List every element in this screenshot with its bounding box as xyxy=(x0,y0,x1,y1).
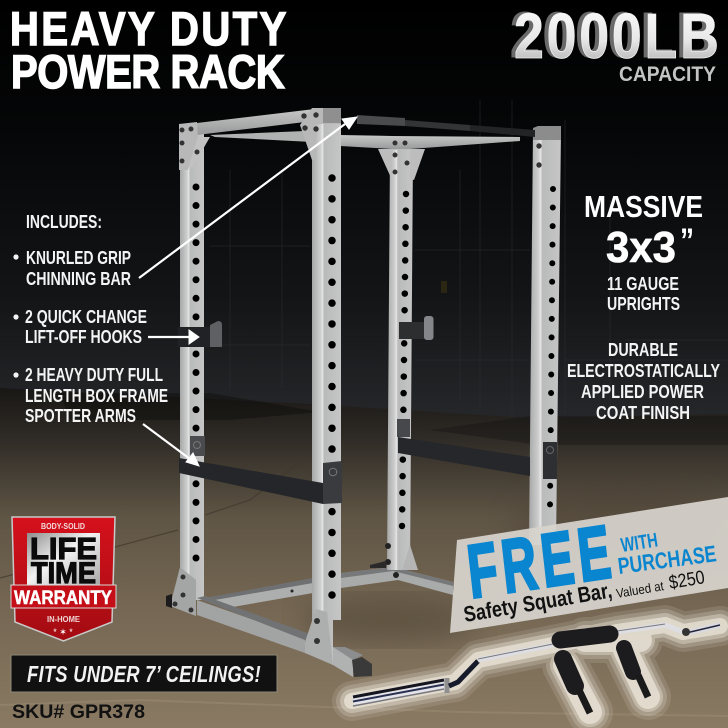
background: dark garage wall xyxy=(0,0,728,420)
specs text: COAT FINISH xyxy=(596,403,690,423)
includes list: INCLUDES: xyxy=(26,212,102,232)
specs text xyxy=(567,189,720,423)
background: concrete floor xyxy=(0,388,728,728)
badge ribbon xyxy=(11,585,116,608)
bonus description: Safety Squat Bar, xyxy=(462,578,614,627)
rear centre upright xyxy=(370,150,418,578)
rear spotter arm xyxy=(397,419,557,479)
left floor base xyxy=(166,567,310,653)
includes list: LENGTH BOX FRAME xyxy=(25,386,168,406)
front centre upright xyxy=(300,108,341,665)
bar glow xyxy=(352,625,720,712)
left spotter arm xyxy=(179,436,342,504)
safety squat bar xyxy=(352,624,720,713)
chrome bar xyxy=(478,625,683,660)
badge brand: BODY-SOLID xyxy=(41,522,85,531)
specs text: APPLIED POWER xyxy=(581,382,704,402)
bonus description: $250 xyxy=(667,567,706,594)
arrow: lift-off hooks xyxy=(148,330,199,344)
capacity heading: 2000LB xyxy=(510,0,715,71)
specs text: UPRIGHTS xyxy=(607,294,680,314)
capacity heading: CAPACITY xyxy=(619,62,716,86)
chin-up bar xyxy=(357,115,535,137)
arrow: spotter arms xyxy=(143,424,199,466)
title: HEAVY DUTY xyxy=(10,4,286,56)
ceiling callout xyxy=(11,655,277,692)
left sleeve xyxy=(353,684,444,701)
with purchase: WITH xyxy=(619,529,659,557)
includes list: 2 HEAVY DUTY FULL xyxy=(25,365,163,385)
title: POWER RACK xyxy=(11,47,285,99)
includes list: 2 QUICK CHANGE xyxy=(25,307,147,327)
bonus description xyxy=(462,567,706,627)
left collar and bend xyxy=(444,678,450,693)
front floor base xyxy=(305,609,372,677)
sku: SKU# GPR378 xyxy=(12,701,145,723)
specs text: MASSIVE xyxy=(584,189,703,224)
pads xyxy=(560,634,610,640)
bonus description: Valued at xyxy=(615,578,665,601)
left top beam xyxy=(179,108,323,170)
specs text: 11 GAUGE xyxy=(607,274,679,294)
includes list: SPOTTER ARMS xyxy=(25,406,136,426)
includes list: CHINNING BAR xyxy=(26,269,131,289)
specs text: 3x3 xyxy=(606,223,676,272)
rear base rails xyxy=(341,567,453,595)
badge footer: IN-HOME xyxy=(47,615,81,624)
pegs xyxy=(579,675,648,713)
left upright xyxy=(180,132,204,600)
warranty badge xyxy=(11,517,116,641)
free bonus panel xyxy=(450,497,728,633)
badge lettering: TIME xyxy=(31,557,96,590)
specs text: DURABLE xyxy=(608,340,678,360)
rear hook xyxy=(399,316,434,340)
arrow: chinning bar xyxy=(139,117,357,278)
ceiling callout: FITS UNDER 7’ CEILINGS! xyxy=(27,662,261,688)
includes list: KNURLED GRIP xyxy=(26,248,131,268)
badge lettering xyxy=(30,531,97,590)
includes list xyxy=(13,212,168,426)
rear top beam with gussets xyxy=(210,131,520,180)
right upright xyxy=(529,126,561,545)
power rack xyxy=(166,108,561,677)
ribbon text: WARRANTY xyxy=(14,588,112,609)
left hook xyxy=(178,321,222,347)
badge shield xyxy=(12,517,115,641)
badge lettering: LIFE xyxy=(30,531,97,566)
right sleeve xyxy=(686,625,720,633)
title xyxy=(10,4,286,99)
badge stars: * ✶ * xyxy=(53,627,73,637)
badge silver plate xyxy=(27,533,100,586)
specs text: ” xyxy=(680,222,694,260)
left base rail xyxy=(205,578,313,608)
free heading: FREE xyxy=(463,510,620,615)
capacity heading: 2000LB xyxy=(514,0,719,72)
includes list: LIFT-OFF HOOKS xyxy=(25,327,142,347)
